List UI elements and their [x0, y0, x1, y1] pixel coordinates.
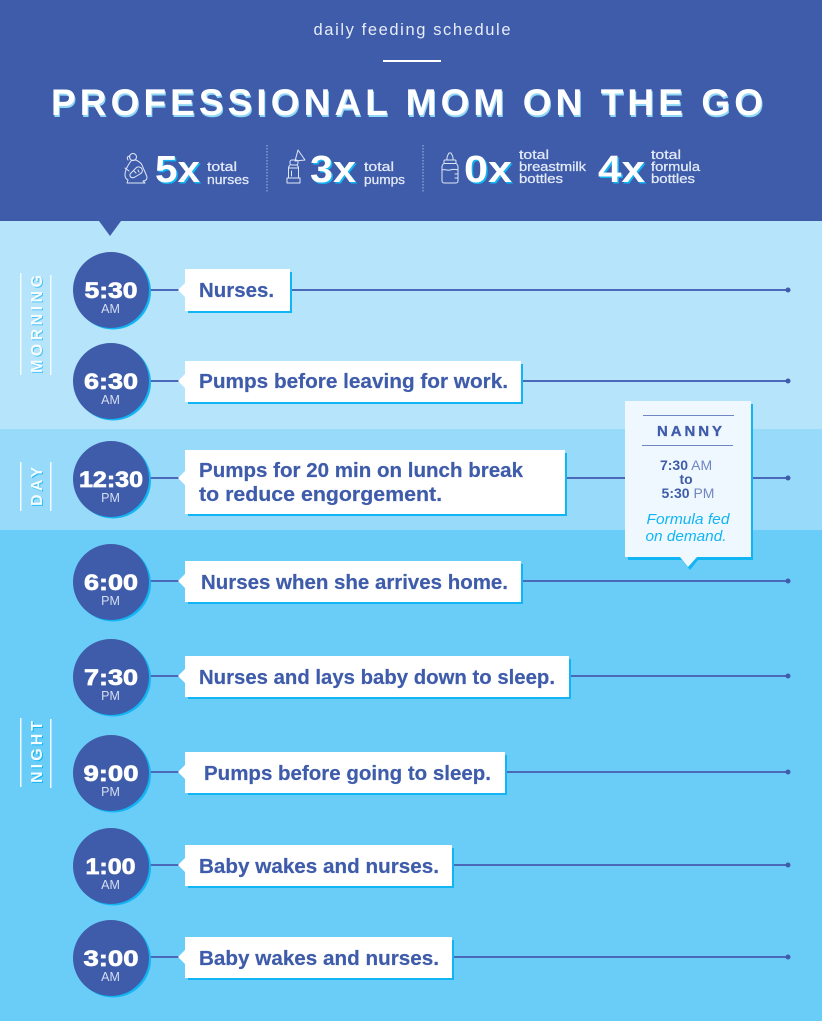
period label: night: NIGHT	[30, 722, 47, 784]
stat: total pumps	[287, 149, 405, 192]
value: 4x	[600, 150, 646, 192]
label: total	[651, 148, 681, 162]
callout note: on demand.	[646, 528, 726, 545]
stat: total formula bottles	[598, 148, 700, 192]
period label: day: DAY	[30, 468, 47, 507]
row: 12:30 PM: 12:30	[79, 467, 143, 492]
band: day	[0, 429, 822, 530]
callout note: Formula fed	[646, 511, 730, 528]
period label: morning: MORNING	[30, 276, 47, 374]
title: PROFESSIONAL MOM ON THE GO	[51, 82, 763, 123]
row: 6:00 PM: PM	[101, 594, 120, 608]
period label: day	[20, 462, 52, 511]
subtitle divider	[383, 60, 441, 62]
stat: total breastmilk bottles	[442, 148, 587, 192]
callout heading: NANNY	[657, 423, 722, 440]
row: 12:30 PM	[73, 441, 790, 518]
row: 9:00 PM: 9:00	[84, 761, 138, 786]
row: 7:30 PM: 7:30	[84, 665, 138, 690]
label: total	[519, 148, 549, 162]
label: breastmilk	[519, 160, 587, 174]
label: nurses	[207, 173, 249, 187]
row: 7:30 PM: Nurses and lays baby down to sleep.	[199, 667, 555, 689]
value: 0x	[466, 150, 514, 192]
title: PROFESSIONAL MOM ON THE GO	[52, 84, 764, 125]
callout times: 5:30 PM	[662, 485, 714, 501]
row: 12:30 PM: to reduce engorgement.	[199, 484, 442, 506]
row: 6:30 AM	[73, 343, 790, 420]
callout: nanny	[625, 401, 753, 570]
label: total	[364, 160, 394, 174]
row: 6:30 AM: 6:30	[84, 369, 138, 394]
row: 5:30 AM: Nurses.	[199, 280, 274, 302]
row: 9:00 PM: Pumps before going to sleep.	[204, 763, 491, 785]
row: 12:30 PM: PM	[101, 491, 120, 505]
callout times: 7:30 AM	[660, 457, 712, 473]
label: pumps	[364, 173, 405, 187]
row: 6:30 AM: Pumps before leaving for work.	[199, 371, 508, 393]
period label: morning	[20, 273, 52, 375]
row: 1:00 AM: AM	[101, 878, 120, 892]
row: 3:00 AM: Baby wakes and nurses.	[199, 948, 439, 970]
callout times: to	[679, 471, 693, 487]
row: 6:00 PM	[73, 544, 790, 622]
row: 1:00 AM: 1:00	[86, 854, 136, 879]
subtitle: daily feeding schedule	[314, 21, 510, 39]
row: 6:00 PM: Nurses when she arrives home.	[201, 572, 508, 594]
icon: bottle	[442, 153, 458, 183]
row: 7:30 PM: PM	[101, 689, 120, 703]
row: 3:00 AM: AM	[101, 970, 120, 984]
period label: day: DAY	[29, 467, 46, 506]
header panel	[0, 0, 822, 236]
row: 1:00 AM: Baby wakes and nurses.	[199, 856, 439, 878]
label: formula	[651, 160, 700, 174]
row: 9:00 PM: PM	[101, 785, 120, 799]
period label: night: NIGHT	[29, 721, 46, 783]
stat: total formula bottles: 4x	[598, 149, 645, 191]
icon: breast pump	[287, 150, 305, 183]
stat divider 2	[422, 145, 424, 193]
row: 6:00 PM: 6:00	[84, 570, 138, 595]
label: bottles	[651, 172, 695, 186]
row: 7:30 PM	[73, 639, 790, 716]
stat: total pumps: 3x	[310, 149, 356, 191]
label: total	[207, 160, 237, 174]
period label: night	[20, 718, 52, 788]
band: night	[0, 530, 822, 1021]
stat: total nurses: 5x	[155, 149, 200, 191]
icon: nursing mother	[125, 154, 147, 183]
row: 5:30 AM: 5:30	[84, 278, 138, 303]
row: 1:00 AM	[73, 828, 790, 906]
band: morning	[0, 221, 822, 429]
value: 3x	[312, 150, 358, 192]
row: 3:00 AM	[73, 920, 790, 998]
row: 5:30 AM: AM	[101, 302, 120, 316]
row: 6:30 AM: AM	[101, 393, 120, 407]
stat: total breastmilk bottles: 0x	[464, 149, 512, 191]
label: bottles	[519, 172, 563, 186]
stat divider 1	[266, 145, 268, 193]
value: 5x	[156, 150, 202, 192]
row: 3:00 AM: 3:00	[84, 946, 138, 971]
row: 12:30 PM: Pumps for 20 min on lunch break	[199, 460, 524, 482]
row: 5:30 AM	[73, 252, 790, 330]
period label: morning: MORNING	[29, 275, 46, 373]
row: 9:00 PM	[73, 735, 790, 812]
stat: total nurses	[125, 149, 249, 192]
